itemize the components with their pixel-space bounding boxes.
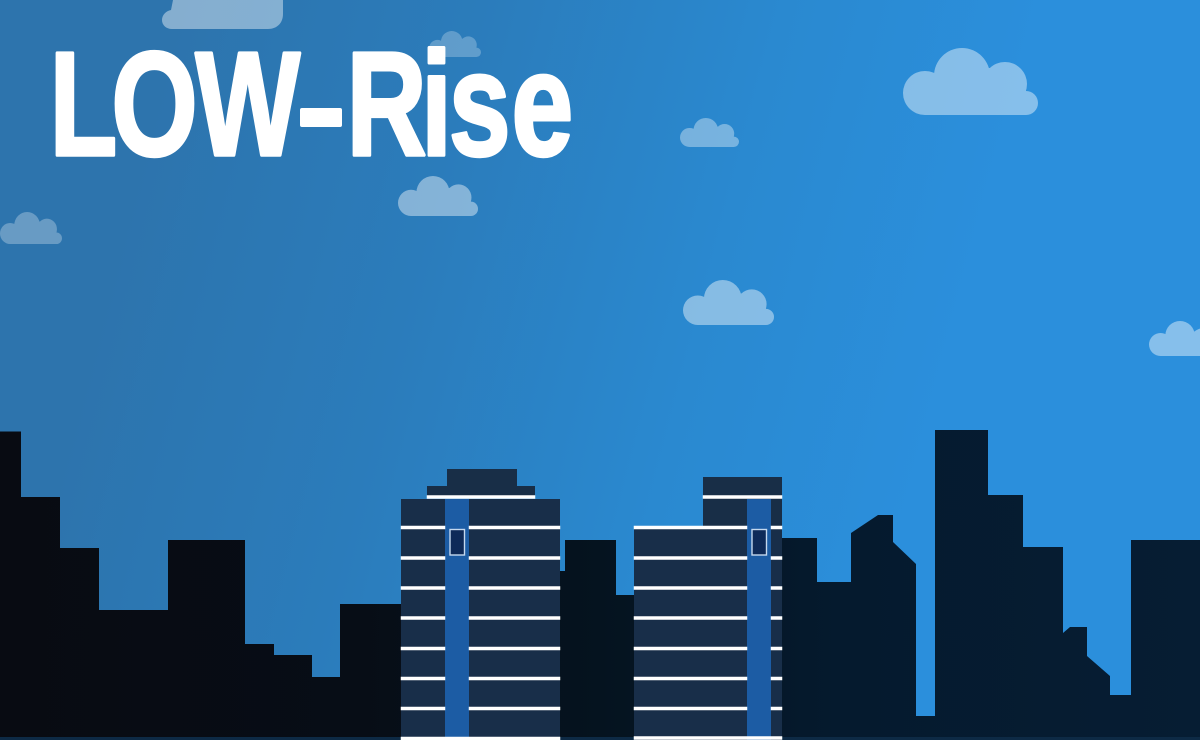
skyline silhouette xyxy=(0,430,1200,737)
cloud: top cropped xyxy=(162,0,283,29)
cloud: far left xyxy=(0,212,62,244)
cloud: mid xyxy=(683,280,774,325)
bottom ground strip xyxy=(0,737,1200,740)
right building upper tier xyxy=(703,477,782,527)
right building window xyxy=(752,530,766,555)
cloud: small behind title xyxy=(429,31,481,57)
building: right low-rise xyxy=(634,477,782,740)
right building body xyxy=(634,527,782,740)
right building floor lines xyxy=(634,496,782,740)
right building blue strip xyxy=(747,499,771,740)
cloud: small centre xyxy=(680,118,739,147)
building: left low-rise xyxy=(401,469,560,740)
cloud: below title xyxy=(398,176,478,216)
left building roof crown xyxy=(427,469,535,496)
left building body xyxy=(401,499,560,740)
left building floor lines xyxy=(401,496,560,740)
cloud: large right xyxy=(903,48,1038,115)
left building central blue strip xyxy=(445,499,469,740)
cloud: right edge xyxy=(1149,321,1200,356)
title: LOW-Rise xyxy=(50,21,573,188)
left building window xyxy=(450,530,464,555)
